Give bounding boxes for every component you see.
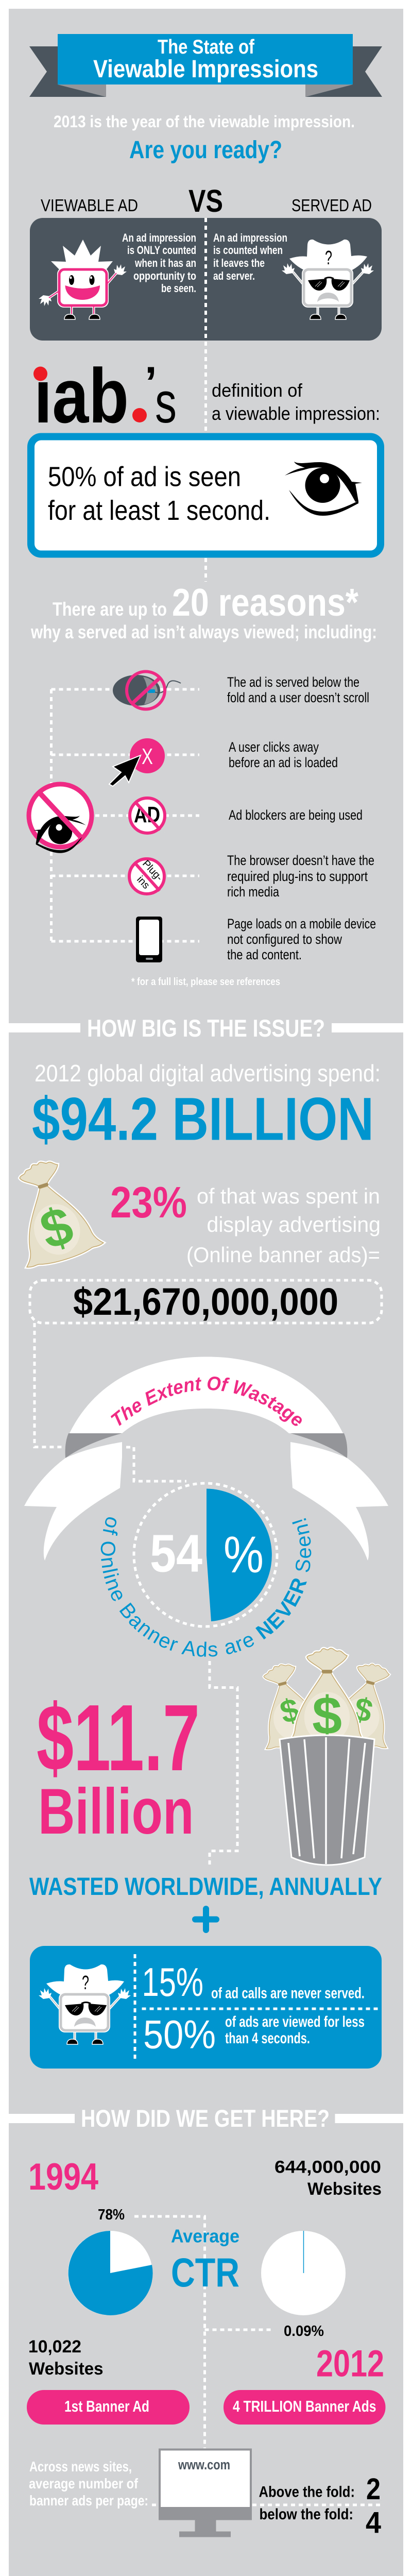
chart: 1994 CTR pie: 78%	[98, 2207, 125, 2223]
character: sad served ad	[282, 240, 374, 319]
icon: close button and cursor	[109, 738, 165, 786]
character: sad served ad: ?	[325, 247, 332, 269]
icon: plug-ins blocked: ins	[134, 874, 152, 891]
stat: 50 percent: 50%	[143, 2011, 216, 2057]
2012 stats: Websites	[307, 2179, 382, 2199]
banner ribbon tails	[29, 46, 382, 97]
icon: crossed-out mouse	[113, 672, 181, 709]
reasons list: required plug-ins to support	[227, 869, 368, 884]
stat: 15 percent: 15%	[142, 1959, 203, 2005]
stat: 50 percent: of ads are viewed for less	[225, 2013, 365, 2030]
title text	[93, 36, 318, 83]
icon: money bag: $	[33, 1195, 80, 1261]
reasons heading: 20 reasons*	[172, 581, 359, 624]
1994 stats: Websites	[29, 2359, 103, 2379]
definition heading	[212, 380, 380, 424]
reasons heading	[30, 581, 377, 642]
panel: iab definition box	[31, 437, 381, 554]
chart: 54 percent pie: 54	[150, 1524, 202, 1583]
icon: monitor: www.com	[178, 2457, 230, 2472]
stat: 50 percent: than 4 seconds.	[225, 2030, 310, 2047]
icon: money bags in trash can: $	[277, 1691, 303, 1731]
intro text	[54, 112, 355, 164]
reasons list: The browser doesn’t have the	[227, 853, 374, 868]
icon: close button and cursor: X	[142, 744, 153, 769]
reasons heading: There are up to	[53, 599, 167, 620]
1994 stats: 1994	[28, 2156, 98, 2198]
reasons list: Ad blockers are being used	[229, 807, 363, 823]
iab logo: ’	[145, 358, 157, 408]
stat: 15 percent	[142, 1959, 365, 2005]
2012 stats: 2012	[316, 2343, 384, 2384]
display advertising share: (Online banner ads)=	[186, 1243, 380, 1267]
chart: 1994 CTR pie	[68, 2207, 153, 2315]
reasons dashed tree	[52, 689, 199, 941]
chart: 2012 CTR pie	[261, 2231, 346, 2340]
icon: ad blocker: AD	[134, 802, 160, 827]
extent of wastage ribbon	[24, 1357, 388, 1560]
display advertising share: display advertising	[207, 1212, 381, 1236]
panel: viewable vs served	[30, 218, 382, 341]
iab logo: iab	[34, 352, 129, 439]
wasted amount	[37, 1685, 200, 1848]
extent of wastage ribbon: The Extent Of Wastage	[111, 1377, 302, 1426]
banner ads per page text: average number of	[29, 2476, 139, 2492]
fold counts: 4	[366, 2506, 381, 2539]
banner ads per page text	[29, 2459, 148, 2509]
average CTR label: CTR	[171, 2249, 239, 2295]
wasted amount: $11.7	[37, 1685, 200, 1790]
served ad definition: ad server.	[213, 269, 255, 282]
chart: 54 percent pie: of Online Banner Ads are NEVER Seen!	[101, 1517, 311, 1657]
banner ads per page text: banner ads per page:	[29, 2493, 148, 2509]
definition heading: definition of	[212, 380, 303, 401]
served ad definition: is counted when	[213, 244, 283, 257]
pill: 1st banner ad: 1st Banner Ad	[64, 2397, 149, 2415]
fold counts	[259, 2472, 381, 2539]
character: sad served ad	[39, 1964, 131, 2044]
definition text	[48, 462, 270, 526]
icon: money bags in trash can: $	[350, 1690, 376, 1730]
banner ads per page text: Across news sites,	[29, 2459, 132, 2475]
average CTR label: Average	[171, 2226, 239, 2246]
definition text: 50% of ad is seen	[48, 462, 241, 493]
viewable ad definition: An ad impression	[122, 231, 196, 244]
pill: 1st banner ad	[27, 2390, 190, 2425]
stat: 50 percent	[143, 2011, 365, 2057]
viewable ad definition: be seen.	[161, 282, 196, 295]
chart: 2012 CTR pie: 0.09%	[284, 2323, 324, 2340]
reasons list: Page loads on a mobile device	[227, 916, 376, 931]
reasons list	[227, 674, 376, 962]
intro text: 2013 is the year of the viewable impression.	[54, 112, 355, 131]
definition heading: a viewable impression:	[212, 403, 380, 424]
display advertising share: 23%	[110, 1178, 187, 1227]
served ad definition	[213, 231, 287, 282]
icon: plus	[195, 1909, 216, 1930]
reasons list: before an ad is loaded	[229, 755, 338, 770]
average CTR label	[171, 2226, 239, 2295]
footnote: * for a full list, please see references	[131, 976, 280, 988]
served ad definition: An ad impression	[213, 231, 287, 244]
section heading: how big is the issue: HOW BIG IS THE ISSUE?	[87, 1014, 325, 1042]
icon: plug-ins blocked: Plug-	[140, 858, 165, 884]
1994 stats: 10,022	[28, 2337, 81, 2357]
pill: 4 trillion banner ads	[224, 2390, 385, 2425]
fold counts: Above the fold:	[259, 2483, 355, 2501]
icon: crossed-out eye	[29, 784, 92, 853]
title text: Viewable Impressions	[93, 56, 318, 83]
versus headings: VS	[188, 183, 223, 218]
callout: banner spend total: $21,670,000,000	[73, 1280, 338, 1323]
chart: 54 percent pie: %	[224, 1526, 264, 1584]
fold counts: below the fold:	[260, 2506, 353, 2523]
iab logo: s	[155, 370, 177, 435]
display advertising share: of that was spent in	[197, 1184, 380, 1208]
wasted amount: Billion	[38, 1776, 194, 1848]
viewable ad definition: when it has an	[134, 257, 196, 269]
section heading: how did we get here: HOW DID WE GET HERE?	[81, 2105, 330, 2132]
icon: eye	[285, 462, 362, 516]
character: sad served ad: ?	[82, 1972, 89, 1994]
viewable ad definition: opportunity to	[133, 269, 196, 282]
viewable ad definition	[122, 231, 196, 295]
intro text: Are you ready?	[129, 137, 282, 164]
reasons list: the ad content.	[227, 947, 302, 962]
icon: mobile phone	[136, 917, 162, 962]
reasons list: fold and a user doesn’t scroll	[227, 690, 369, 705]
title banner	[29, 34, 382, 97]
icon: money bags in trash can: $	[312, 1686, 342, 1746]
icon: money bag	[0, 1151, 105, 1271]
panel: ad call stats	[30, 1946, 382, 2069]
2012 stats	[274, 2158, 384, 2384]
versus headings: VIEWABLE AD	[41, 196, 138, 215]
versus headings	[41, 183, 372, 218]
reasons list: A user clicks away	[229, 739, 319, 755]
pill: 4 trillion banner ads: 4 TRILLION Banner Ads	[233, 2397, 376, 2415]
icon: ad blocker	[130, 798, 165, 833]
1994 stats	[28, 2156, 103, 2379]
icon: money bags in trash can	[246, 1648, 406, 1865]
title text: The State of	[158, 36, 255, 58]
display advertising share	[110, 1178, 381, 1267]
global spend	[32, 1060, 381, 1153]
icon: monitor	[159, 2448, 252, 2537]
served ad definition: it leaves the	[213, 257, 265, 269]
definition text: for at least 1 second.	[48, 495, 270, 526]
character: happy viewable ad	[39, 240, 127, 319]
fold counts: 2	[366, 2472, 381, 2506]
versus headings: SERVED AD	[291, 196, 372, 215]
icon: plug-ins blocked	[129, 858, 165, 894]
viewable ad definition: is ONLY counted	[127, 244, 196, 257]
reasons list: The ad is served below the	[227, 674, 359, 690]
2012 stats: 644,000,000	[274, 2158, 381, 2177]
reasons list: rich media	[227, 884, 280, 900]
stat: 15 percent: of ad calls are never served.	[211, 1985, 365, 2002]
reasons list: not configured to show	[227, 931, 342, 947]
